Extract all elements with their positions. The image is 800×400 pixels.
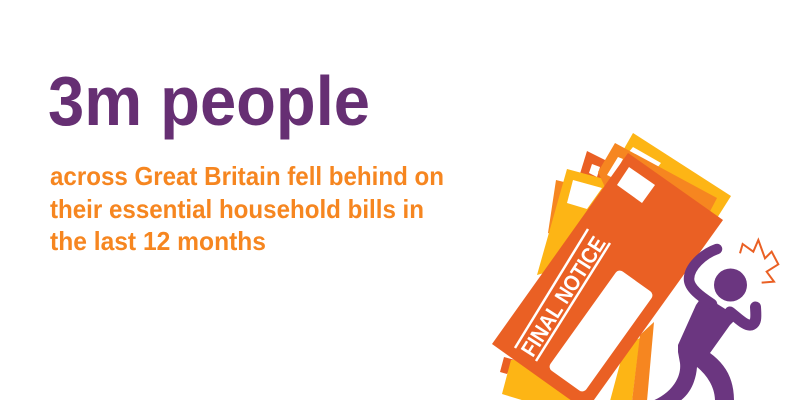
final notice label: FINAL NOTICE xyxy=(516,232,611,361)
envelope: back left orange xyxy=(548,180,580,240)
bent arm xyxy=(730,307,756,325)
envelope: back dark orange xyxy=(500,151,625,374)
envelope: left yellow xyxy=(502,169,608,400)
icon: pain burst xyxy=(740,240,778,283)
person xyxy=(652,249,756,400)
illustration: final notice envelopes and person xyxy=(492,133,778,400)
head xyxy=(714,268,747,302)
envelope: orange xyxy=(598,143,717,400)
envelope: front final notice xyxy=(492,153,723,400)
raised arm xyxy=(689,249,717,304)
title: 3m people xyxy=(48,62,370,140)
stamp xyxy=(617,167,655,203)
torso and legs xyxy=(652,295,738,400)
address window xyxy=(548,269,654,393)
subtitle text block: their essential household bills in xyxy=(50,194,424,224)
subtitle text block: the last 12 months xyxy=(50,226,266,256)
subtitle text block: across Great Britain fell behind on xyxy=(50,161,444,191)
envelope: back right yellow xyxy=(600,133,731,400)
subtitle text block xyxy=(50,161,444,256)
